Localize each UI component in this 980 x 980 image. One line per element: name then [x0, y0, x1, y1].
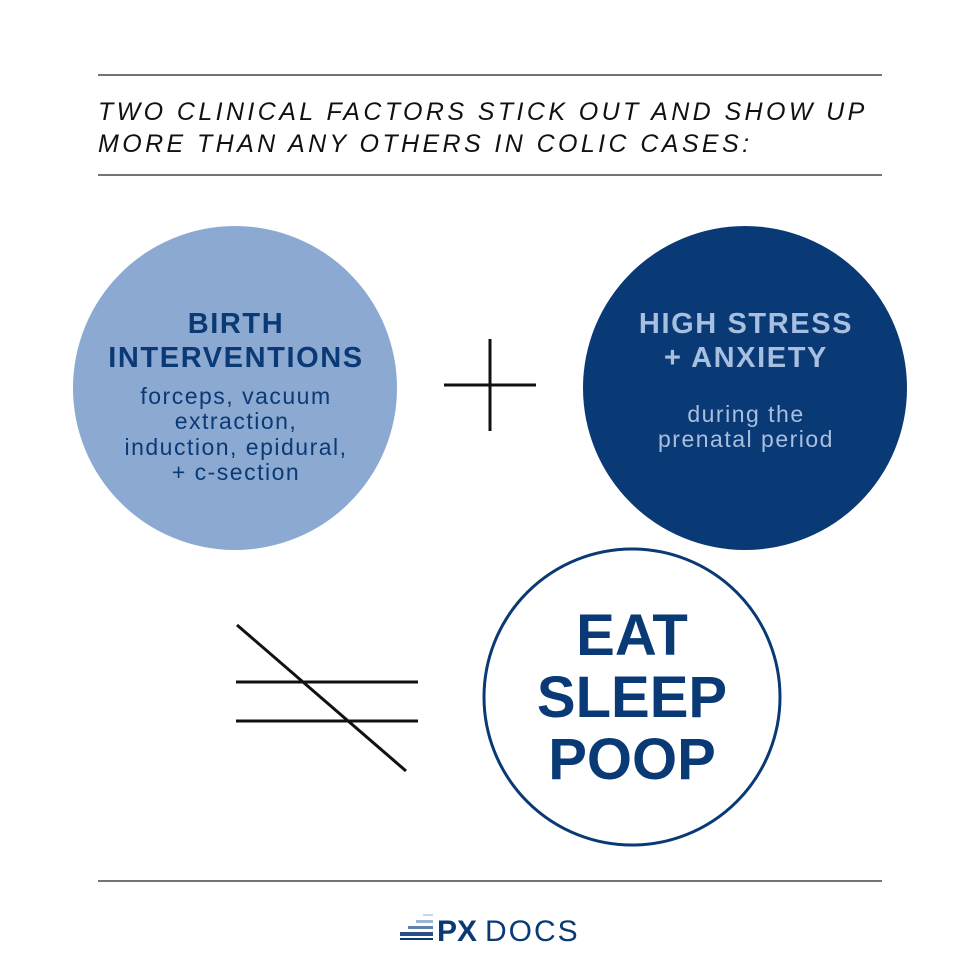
- heading: MORE THAN ANY OTHERS IN COLIC CASES:: [98, 130, 752, 158]
- panel: high stress + anxiety: + ANXIETY: [664, 342, 828, 374]
- panel: eat sleep poop: SLEEP: [537, 665, 727, 730]
- panel: birth interventions: forceps, vacuum: [140, 383, 332, 409]
- panel: eat sleep poop: POOP: [548, 727, 716, 792]
- icon: plus: [444, 339, 536, 431]
- heading: [98, 98, 868, 158]
- panel: birth interventions: [73, 226, 397, 550]
- panel: high stress + anxiety: during the: [687, 401, 805, 427]
- panel: eat sleep poop: EAT: [576, 603, 688, 668]
- logo: px docs: [400, 914, 580, 948]
- panel: birth interventions: extraction,: [175, 408, 297, 434]
- panel: birth interventions: + c-section: [172, 459, 300, 485]
- panel: high stress + anxiety: [583, 226, 907, 550]
- logo: px docs: DOCS: [485, 915, 580, 948]
- panel: high stress + anxiety: prenatal period: [658, 426, 834, 452]
- panel: high stress + anxiety: HIGH STRESS: [639, 308, 853, 340]
- panel: birth interventions: induction, epidural,: [124, 434, 348, 460]
- panel: eat sleep poop: [484, 549, 780, 845]
- panel: birth interventions: BIRTH: [188, 308, 284, 340]
- heading: TWO CLINICAL FACTORS STICK OUT AND SHOW UP: [98, 98, 868, 126]
- panel: birth interventions: INTERVENTIONS: [108, 342, 364, 374]
- logo: px docs: PX: [437, 915, 477, 948]
- icon: not equal sign: [236, 625, 418, 771]
